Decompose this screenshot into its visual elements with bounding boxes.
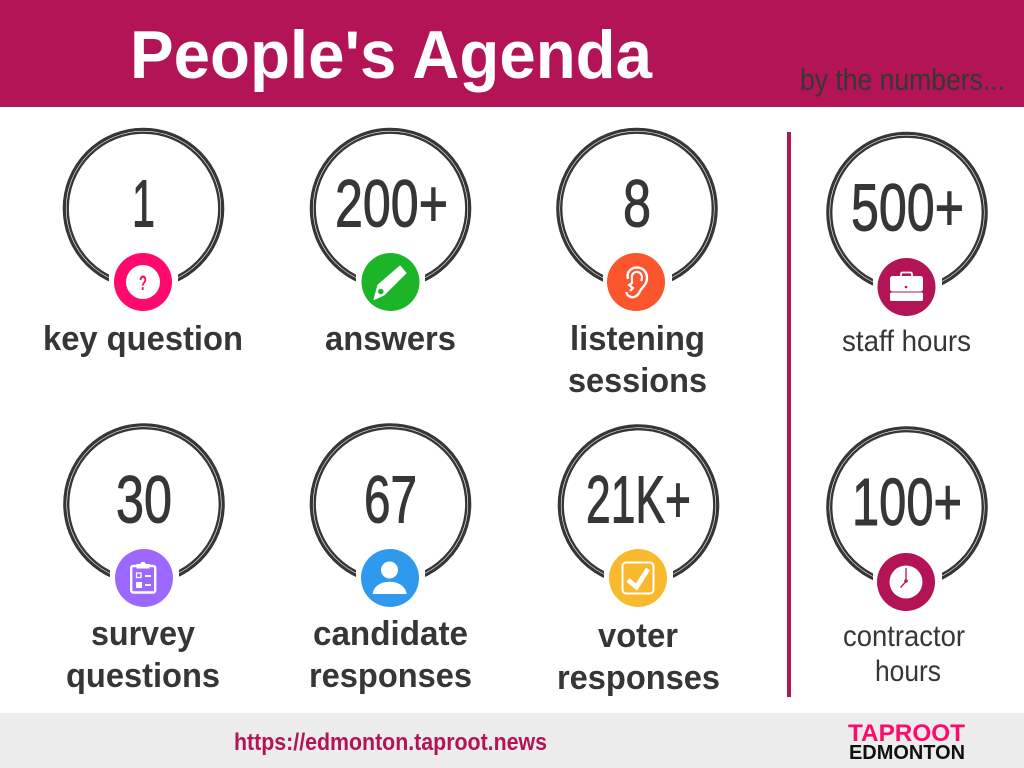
footer bar xyxy=(0,713,1024,768)
stat: 1 key question: key question xyxy=(43,320,243,358)
stat: 30 survey questions: 30 xyxy=(116,462,172,538)
icon: pencil xyxy=(362,253,420,311)
stat: 8 listening sessions: 8 xyxy=(623,166,651,242)
stat: 1 key question xyxy=(43,129,243,358)
stat: 500+ staff hours xyxy=(828,133,986,358)
stat: 200+ answers: 200+ xyxy=(335,166,448,242)
stat: 30 survey questions xyxy=(65,425,223,695)
stat: 21K+ voter responses: 21K+ xyxy=(586,462,691,538)
stat: 500+ staff hours: staff hours xyxy=(842,325,971,358)
stat: 200+ answers xyxy=(311,129,470,358)
icon: clipboard xyxy=(115,549,173,607)
stat: 1 key question: 1 xyxy=(132,166,155,242)
stat: 8 listening sessions: listening xyxy=(570,320,705,358)
stat: 8 listening sessions: sessions xyxy=(568,362,707,400)
stat: 67 candidate responses: 67 xyxy=(364,462,417,538)
icon: checkbox xyxy=(609,549,667,607)
vertical divider xyxy=(787,132,791,697)
stat: 67 candidate responses xyxy=(309,425,472,695)
icon: ear xyxy=(607,253,665,311)
logo: Taproot Edmonton xyxy=(848,720,965,764)
stat: 30 survey questions: questions xyxy=(66,657,220,695)
footer url: https://edmonton.taproot.news xyxy=(234,729,547,756)
stat: 500+ staff hours: 500+ xyxy=(851,170,964,246)
stat: 21K+ voter responses: voter xyxy=(598,617,678,655)
stat: 100+ contractor hours: contractor xyxy=(843,620,965,653)
icon: briefcase xyxy=(878,258,936,316)
stat: 21K+ voter responses: responses xyxy=(557,659,720,697)
stat: 8 listening sessions xyxy=(558,129,716,400)
stat: 100+ contractor hours xyxy=(828,428,986,688)
stat: 67 candidate responses: responses xyxy=(309,657,472,695)
stat: 30 survey questions: survey xyxy=(91,615,195,653)
stat: 100+ contractor hours: 100+ xyxy=(852,465,962,540)
icon: question mark xyxy=(114,253,172,311)
stat: 67 candidate responses: candidate xyxy=(313,615,468,653)
logo: Taproot Edmonton: TAPROOT xyxy=(848,720,965,747)
header banner xyxy=(0,0,1024,107)
stat: 100+ contractor hours: hours xyxy=(875,655,941,688)
title: People's Agenda xyxy=(130,17,653,93)
stat: 21K+ voter responses xyxy=(557,426,720,697)
logo: Taproot Edmonton: EDMONTON xyxy=(849,742,965,764)
stat: 200+ answers: answers xyxy=(325,320,456,358)
icon: person xyxy=(361,549,419,607)
icon: clock xyxy=(877,553,935,611)
icon: question mark: ? xyxy=(139,272,147,295)
